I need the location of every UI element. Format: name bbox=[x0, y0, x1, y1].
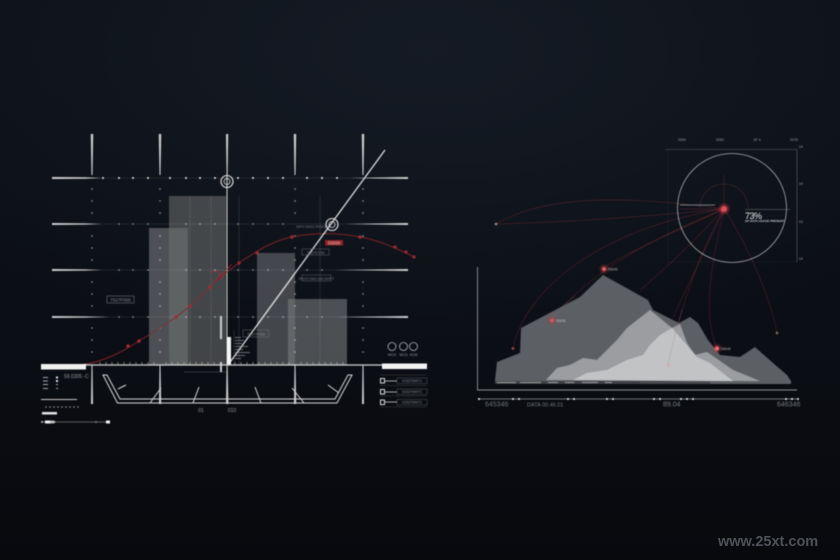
legend list bbox=[380, 375, 427, 407]
target marker: diagonal bbox=[326, 218, 338, 230]
frame labels: top: 0054 bbox=[678, 138, 686, 142]
white tab: right bbox=[382, 364, 427, 369]
legend list: 0153754971 bbox=[402, 390, 422, 394]
white tab: left bbox=[41, 364, 86, 370]
axis labels under tray: 01 bbox=[198, 408, 204, 414]
mini white bar bbox=[42, 412, 57, 414]
grid marker dots bbox=[102, 177, 338, 179]
node: mountain right bbox=[714, 346, 731, 352]
boxed label: left: 7527P056 bbox=[110, 298, 131, 302]
chart base band bbox=[495, 381, 791, 384]
panel: right mountain and radar chart bbox=[478, 138, 803, 408]
radar frame bbox=[665, 150, 797, 262]
boxed label: left bbox=[107, 296, 134, 303]
node: mountain left bbox=[549, 318, 566, 324]
node: mountain right: 56646 bbox=[721, 347, 731, 351]
small faint nodes bbox=[495, 223, 778, 366]
radar center node bbox=[720, 205, 728, 213]
red tag bbox=[325, 240, 343, 246]
timeline marker dots bbox=[478, 398, 799, 400]
frame labels: right: 04 bbox=[799, 220, 803, 224]
three gauge icons: WCS bbox=[388, 353, 397, 357]
frame labels: top: 0054 bbox=[716, 138, 724, 142]
faint arcs over mountain bbox=[552, 296, 682, 365]
bar chart bbox=[149, 196, 347, 365]
three gauge icons: WCS bbox=[399, 353, 408, 357]
boxed label: bar bbox=[243, 330, 269, 337]
axis label: left value: 645346 bbox=[485, 402, 508, 408]
mini dot row bbox=[45, 406, 79, 408]
axis labels under tray: 010 bbox=[228, 408, 236, 414]
chart axes bbox=[478, 267, 797, 390]
mini table bbox=[43, 376, 58, 389]
radar circle bbox=[678, 154, 790, 262]
red connection arcs bbox=[496, 175, 777, 365]
frame labels: right: 04 bbox=[799, 182, 803, 186]
red tag: 59898 bbox=[328, 241, 341, 246]
tray diagram bbox=[103, 375, 352, 403]
three gauge icons: SCM bbox=[410, 353, 417, 357]
red curve bbox=[80, 234, 416, 365]
mountain area chart bbox=[495, 275, 791, 381]
percent caption: OF DATA USAGE PRESENT bbox=[745, 219, 784, 223]
boxed label: lower right: INVSTMN MKSRFT bbox=[299, 276, 335, 281]
slider bbox=[41, 420, 110, 424]
axis label: right value: 646346 bbox=[777, 402, 800, 408]
node: mountain peak: 56646 bbox=[608, 268, 618, 272]
legend list: 0153754971 bbox=[402, 400, 422, 404]
small code label: 59.0305 -C bbox=[64, 374, 89, 380]
axis tick dots bbox=[478, 398, 797, 400]
node: mountain peak bbox=[601, 266, 618, 272]
watermark: www.25xt.com bbox=[717, 534, 818, 550]
axis labels under tray bbox=[198, 408, 236, 414]
boxed label: right chart: 7527P056 bbox=[306, 250, 325, 255]
frame labels: right: 04 bbox=[799, 145, 803, 149]
boxed label: right chart bbox=[302, 249, 329, 255]
frame labels: top bbox=[678, 138, 798, 142]
frame labels: top: 0078 bbox=[790, 138, 798, 142]
frame labels: right: 04 bbox=[799, 257, 803, 261]
diagonal white line bbox=[228, 150, 385, 365]
baseline ruler bbox=[41, 362, 427, 372]
target marker: top bbox=[221, 176, 233, 188]
node: mountain left: 56646 bbox=[556, 319, 566, 323]
axis label: date: DATA 00.46.01 bbox=[527, 402, 564, 408]
boxed label: bar: 7527P056 bbox=[247, 332, 266, 336]
small label: upper grid: SPH 0091 PHD55 bbox=[296, 224, 329, 229]
white vertical markers bbox=[220, 316, 231, 372]
frame labels: right bbox=[799, 145, 803, 261]
legend list: 0153754971 bbox=[402, 379, 422, 383]
three gauge icons bbox=[388, 342, 418, 357]
grid lines bbox=[52, 134, 408, 404]
percent value: 73% bbox=[745, 211, 762, 221]
small data text block bbox=[235, 337, 250, 359]
frame labels: top: 0P 4 bbox=[753, 138, 761, 142]
axis label: center value: 89.04 bbox=[663, 402, 681, 408]
panel: left bar and curve chart bbox=[41, 134, 427, 424]
mini rule bbox=[41, 398, 77, 400]
